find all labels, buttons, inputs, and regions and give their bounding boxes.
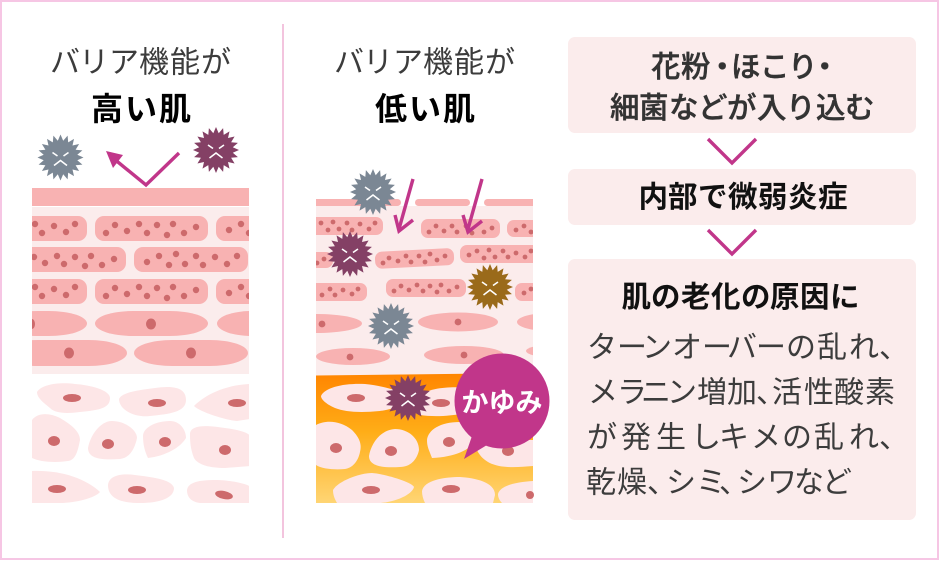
heading: low barrier skin [334, 46, 515, 127]
callout: itch bubble [454, 354, 550, 459]
upper skin background [32, 207, 249, 374]
arrow: entry into skin 1 [395, 179, 413, 231]
heading: high barrier skin [50, 46, 231, 127]
horny cell rows with dots [316, 217, 533, 301]
callout: itch bubble: かゆみ [462, 388, 542, 418]
arrow: chevron down 1 [708, 139, 756, 163]
heading: low barrier skin: バリア機能が [334, 46, 515, 80]
skin surface band [32, 188, 249, 206]
upper skin background [316, 206, 533, 376]
panel: causes of skin ageing [568, 259, 916, 520]
icon: purple germ in skin [327, 231, 373, 277]
heading: high barrier skin: 高い肌 [91, 91, 191, 127]
elongated cells with nuclei [32, 311, 249, 366]
panel: slight internal inflammation [568, 169, 916, 225]
arrow: entry into skin 2 [463, 179, 482, 232]
text block: causes list: メラニン増加、活性酸素 [588, 376, 895, 410]
text block: causes list: 乾燥、シミ、シワなど [586, 466, 852, 500]
icon: brown germ in skin [467, 264, 513, 310]
text block: causes list: が発生しキメの乱れ、 [587, 422, 909, 454]
heading: high barrier skin: バリア機能が [50, 46, 231, 80]
heading: low barrier skin: 低い肌 [375, 91, 475, 127]
icon: gray germ [38, 134, 84, 180]
arrow: chevron down 2 [708, 230, 756, 254]
icon: gray germ deep [368, 303, 414, 349]
horny cell rows with dots [32, 216, 249, 304]
panel: high barrier skin diagram [32, 188, 249, 503]
panel: low barrier skin diagram [316, 199, 533, 376]
lower skin cells [32, 383, 250, 503]
text block: causes list: ターンオーバーの乱れ、 [587, 332, 909, 364]
icon: gray germ at surface [350, 169, 396, 215]
inflamed orange layer with cells [316, 373, 534, 503]
panel: allergens enter: 花粉・ほこり・ [651, 51, 840, 84]
divider [282, 24, 284, 538]
panel: slight internal inflammation: 内部で微弱炎症 [638, 181, 848, 214]
elongated cells with nuclei [316, 312, 533, 365]
panel: allergens enter [568, 37, 916, 133]
text block: causes list [586, 332, 909, 500]
icon: purple germ in inflamed layer [385, 375, 431, 421]
broken skin surface band [306, 199, 544, 206]
icon: purple germ [193, 127, 239, 173]
heading: causes: 肌の老化の原因に [622, 281, 860, 314]
panel: allergens enter: 細菌などが入り込む [610, 92, 875, 125]
arrow: germs bounced off [106, 151, 179, 185]
